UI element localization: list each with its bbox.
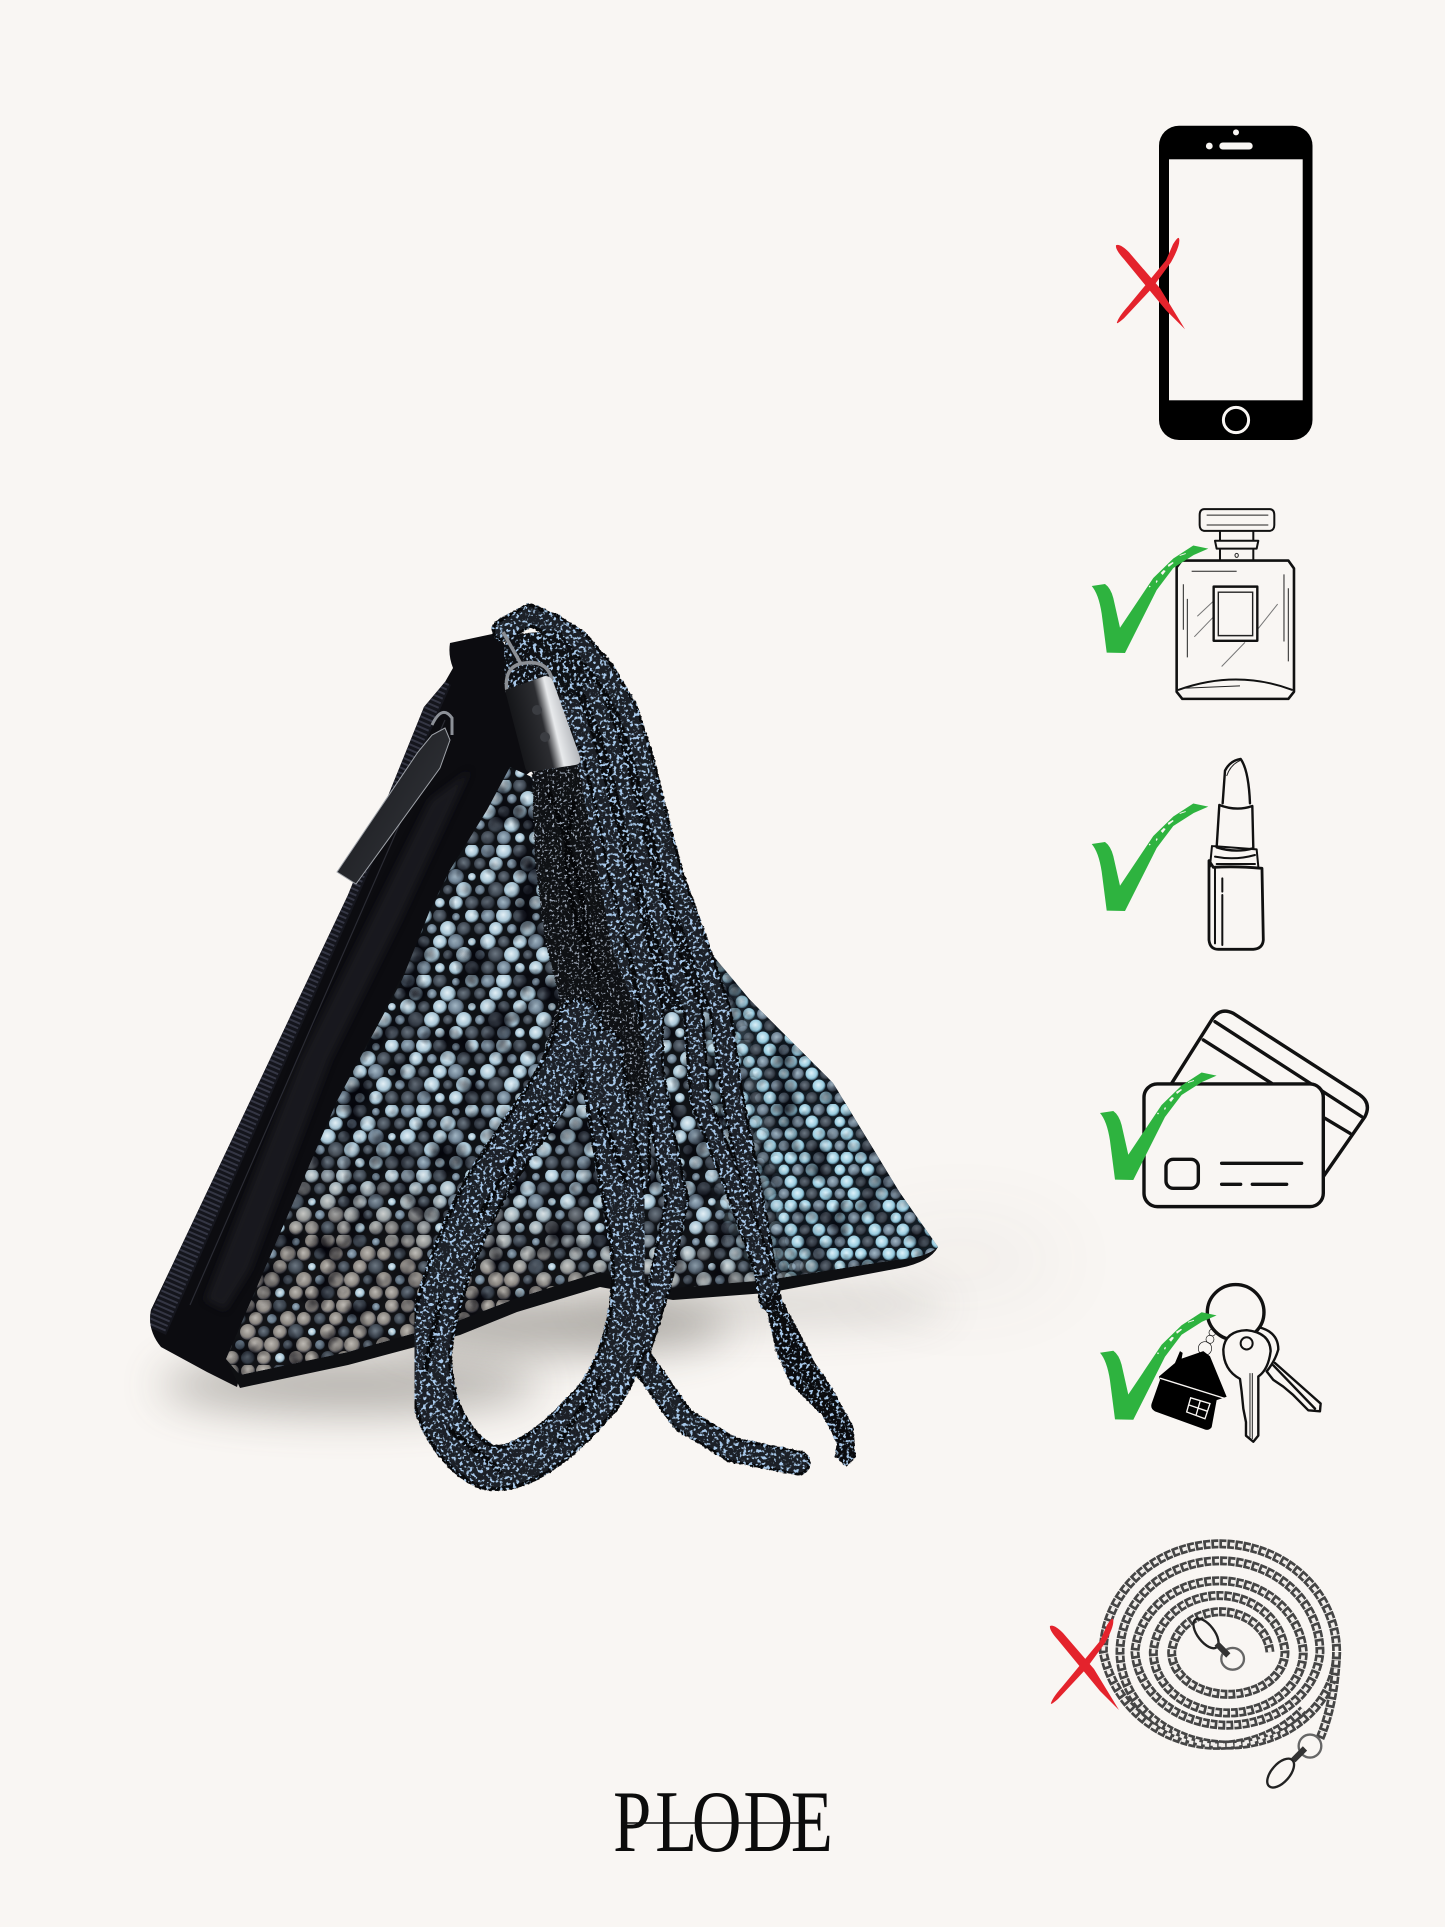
green check mark (1100, 1072, 1217, 1180)
phone details (1206, 129, 1253, 150)
key two (1260, 1327, 1321, 1411)
icon: smartphone, not allowed (1116, 126, 1312, 440)
red cross mark (1050, 1619, 1119, 1710)
green check mark (1092, 804, 1208, 911)
icon: chain strap, not allowed (1050, 1544, 1337, 1792)
icon: lipstick, allowed (1092, 759, 1263, 949)
braided tassel loop (425, 1020, 634, 1470)
dark upper braid (532, 764, 650, 1110)
outer clasp (1262, 1735, 1321, 1792)
icon: perfume bottle, allowed (1092, 509, 1294, 699)
soft shadow under pouch (160, 1220, 1070, 1413)
tassel end strands (643, 1290, 856, 1467)
phone screen (1169, 159, 1303, 400)
logo: PLODE: PLODE (613, 1774, 833, 1871)
zipper panel (150, 633, 530, 1387)
lipstick outline (1209, 759, 1263, 949)
key ring (1207, 1285, 1264, 1340)
green check mark (1092, 546, 1208, 653)
house key fob (1151, 1351, 1227, 1430)
rhinestone faces (226, 767, 938, 1388)
metal tassel cap with shackle (503, 632, 580, 772)
green check mark (1100, 1312, 1217, 1420)
product photo: crystal pyramid pouch with tassel (150, 615, 1070, 1470)
cards outline (1144, 1011, 1367, 1207)
infographic canvas (150, 126, 1370, 1852)
phone home button (1223, 407, 1249, 433)
coiled chain (1103, 1544, 1337, 1745)
red cross mark (1116, 238, 1185, 329)
key chain links (1198, 1329, 1227, 1355)
phone body (1159, 126, 1312, 440)
key one (1223, 1330, 1271, 1442)
zipper pull (337, 712, 452, 884)
icon: bank cards, allowed (1100, 1011, 1367, 1207)
inner clasp (1189, 1614, 1244, 1670)
perfume outline (1177, 509, 1294, 699)
icon: house keys, allowed (1100, 1285, 1321, 1442)
tassel side strands (503, 615, 770, 1347)
